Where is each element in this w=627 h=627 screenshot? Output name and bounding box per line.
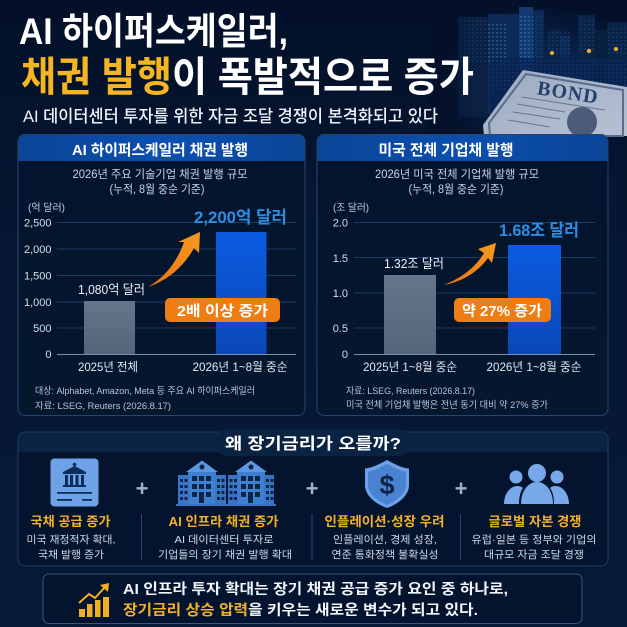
bar chart: left: 2026년 1~8월 중순 — [192, 360, 288, 374]
bar chart: right: 1.5 — [333, 253, 348, 265]
panel header: 미국 전체 기업채 발행 — [378, 142, 514, 159]
title — [19, 11, 474, 100]
panel: US corporate bond issuance — [317, 134, 608, 416]
bar: 2025 — [384, 275, 436, 354]
source note: 자료: LSEG, Reuters (2026.8.17) — [35, 401, 171, 412]
chart subtitle: 2026년 주요 기술기업 채권 발행 규모 — [72, 168, 248, 181]
callout: 27 percent: 약 27% 증가 — [462, 303, 542, 320]
item: treasury supply: 국채 발행 증가 — [38, 549, 104, 561]
bar chart: left: 2025년 전체 — [78, 360, 138, 374]
bar chart: left: 0 — [45, 349, 52, 361]
icon: twin buildings — [176, 460, 276, 506]
chart subtitle — [72, 168, 248, 196]
bar: 2026 — [508, 245, 561, 354]
icon: rising chart — [79, 583, 109, 617]
item: AI infrastructure bonds — [158, 514, 292, 561]
bar chart: left: (억 달러) — [28, 202, 65, 214]
subtitle: AI 데이터센터 투자를 위한 자금 조달 경쟁이 본격화되고 있다 — [23, 107, 438, 126]
bar chart: left: 1,080억 달러 — [78, 282, 145, 297]
bar chart: right: 0.5 — [333, 323, 348, 335]
item: inflation and growth — [324, 514, 444, 561]
item: global capital competition — [472, 514, 596, 561]
callout: conclusion — [43, 574, 582, 624]
arrow: growth — [444, 243, 496, 285]
bar chart: right: 2025년 1~8월 중순 — [363, 360, 457, 374]
bar chart: left — [24, 202, 296, 374]
bar chart: right: 1.32조 달러 — [384, 256, 444, 271]
chart subtitle — [375, 168, 539, 196]
item: inflation and growth: 인플레이션·성장 우려 — [324, 514, 444, 529]
chart subtitle: (누적, 8월 중순 기준) — [110, 183, 205, 196]
item: inflation and growth: 연준 통화정책 불확실성 — [332, 548, 438, 561]
item: AI infrastructure bonds: AI 인프라 채권 증가 — [168, 514, 279, 529]
title: AI 하이퍼스케일러, — [19, 11, 288, 52]
bar chart: right: 1.0 — [333, 288, 348, 300]
bar chart: right: 2026년 1~8월 중순 — [486, 360, 582, 374]
item: global capital competition: 대규모 자금 조달 경쟁 — [484, 548, 584, 561]
panel header: AI 하이퍼스케일러 채권 발행 — [72, 142, 248, 159]
icon: people — [504, 464, 569, 504]
arrow: growth — [148, 232, 200, 287]
bar chart: left: 1,000 — [24, 297, 52, 309]
panel header — [318, 135, 608, 161]
panel: why long-term rates rise — [18, 429, 608, 566]
item: treasury supply: 국채 공급 증가 — [30, 514, 111, 529]
heading — [217, 429, 409, 456]
item: AI infrastructure bonds: AI 데이터센터 투자로 — [174, 534, 274, 546]
item: AI infrastructure bonds: 기업들의 장기 채권 발행 확대 — [158, 548, 292, 561]
bar chart: right: 2.0 — [333, 218, 348, 230]
bar chart: left: 1,500 — [24, 270, 52, 282]
illustration: city skyline and bond certificate: BOND — [536, 77, 600, 109]
icon: government building document — [50, 458, 98, 506]
callout: more than double: 2배 이상 증가 — [177, 303, 268, 320]
bar: 2025 — [84, 301, 135, 354]
source note: 미국 전체 기업채 발행은 전년 동기 대비 약 27% 증가 — [346, 399, 548, 411]
chart subtitle: 2026년 미국 전체 기업채 발행 규모 — [375, 168, 539, 181]
callout: 27 percent — [454, 298, 551, 322]
heading: 왜 장기금리가 오를까? — [225, 435, 401, 453]
plus: + — [455, 476, 467, 501]
panel: AI hyperscaler bond issuance — [18, 134, 305, 416]
bar: 2026 — [216, 232, 266, 354]
item: inflation and growth: 인플레이션, 경제 성장, — [333, 533, 437, 546]
bar chart: right: (조 달러) — [333, 202, 369, 214]
item: treasury supply: 미국 재정적자 확대, — [26, 533, 116, 546]
illustration: city skyline and bond certificate — [430, 0, 627, 155]
source note: 대상: Alphabet, Amazon, Meta 등 주요 AI 하이퍼스케일러 — [35, 385, 255, 397]
conclusion text — [123, 581, 508, 619]
bar chart: right: 1.68조 달러 — [499, 221, 579, 240]
conclusion text: 장기금리 상승 압력 을 키우는 새로운 변수가 되고 있다. — [123, 602, 478, 619]
source note — [346, 386, 548, 411]
bar chart: right — [333, 202, 595, 374]
source note: 자료: LSEG, Reuters (2026.8.17) — [346, 386, 475, 397]
bar chart: left: 500 — [33, 323, 52, 335]
item: global capital competition: 유럽·일본 등 정부와 기업의 — [472, 533, 596, 546]
bar chart: left: 2,500 — [24, 218, 52, 230]
source note — [35, 385, 255, 412]
bar chart: left: 2,000 — [24, 244, 52, 256]
chart subtitle: (누적, 8월 중순 기준) — [408, 183, 504, 196]
bar chart: left: 2,200억 달러 — [194, 208, 287, 227]
panel header — [18, 135, 304, 161]
conclusion text: AI 인프라 투자 확대는 장기 채권 공급 증가 요인 중 하나로, — [123, 581, 508, 598]
callout: more than double — [165, 298, 280, 322]
item: treasury supply — [26, 514, 116, 561]
item: global capital competition: 글로벌 자본 경쟁 — [488, 514, 582, 529]
bar chart: right: 0 — [342, 349, 348, 361]
icon: shield with dollar: $ — [379, 470, 395, 500]
icon: shield with dollar — [365, 460, 409, 508]
title: 채권 발행이 폭발적으로 증가 — [21, 54, 474, 100]
plus: + — [306, 476, 318, 501]
plus: + — [136, 476, 148, 501]
